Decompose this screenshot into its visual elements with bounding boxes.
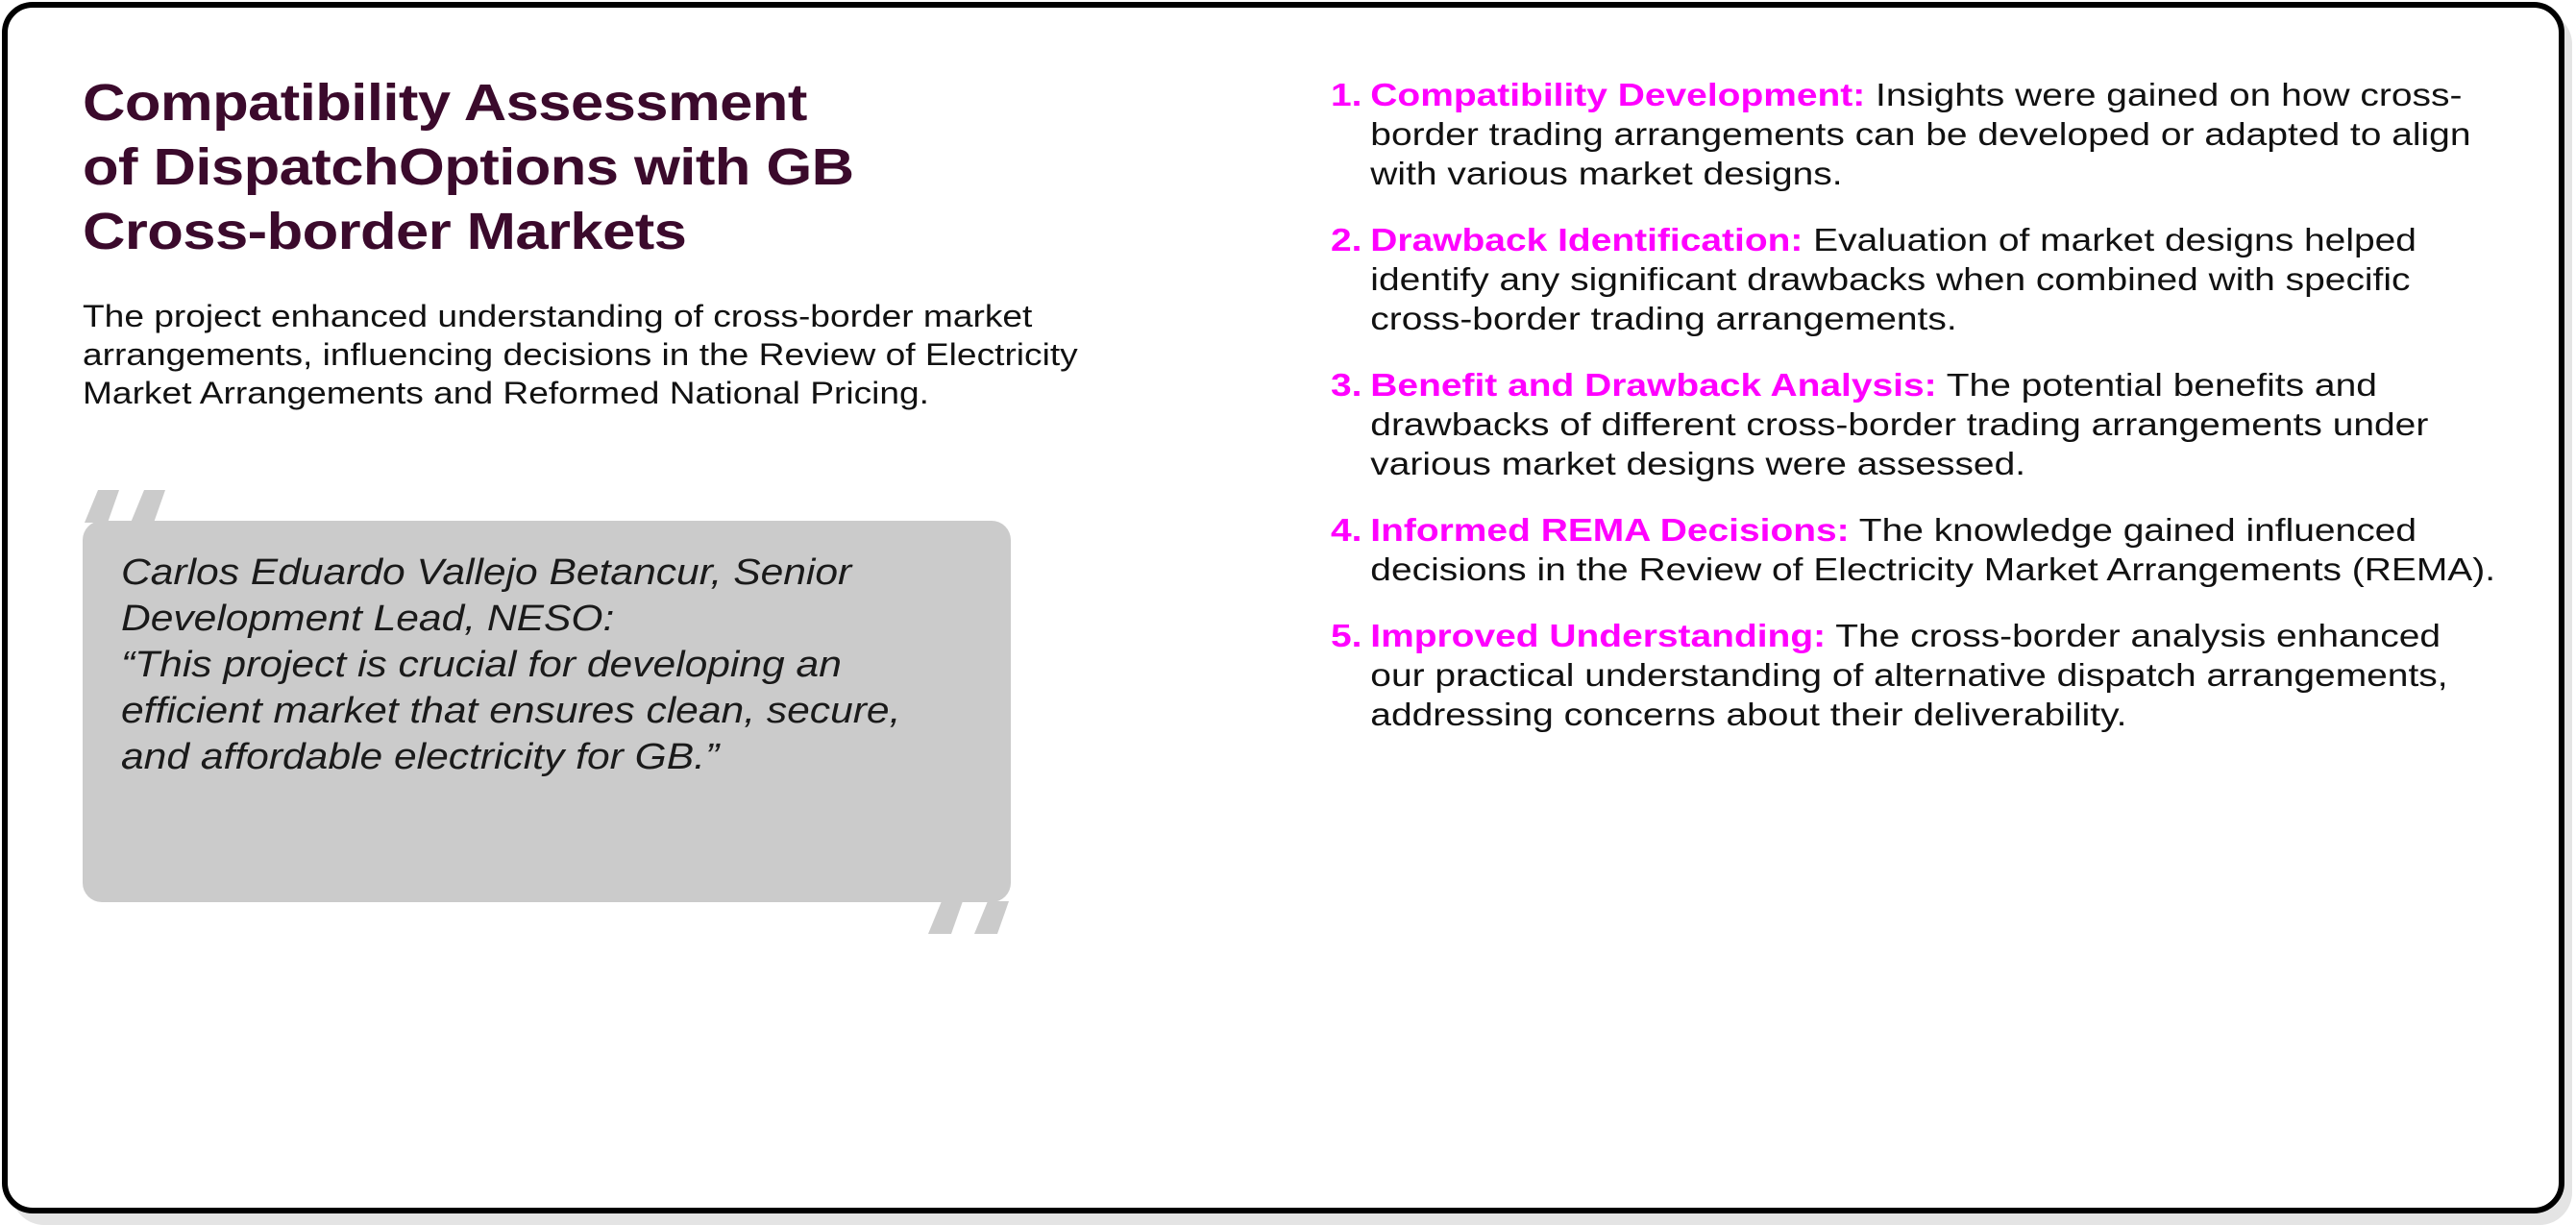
quote text: Carlos Eduardo Vallejo Betancur, Senior: [121, 552, 851, 593]
item 5: addressing concerns about their deliverability.: [1370, 697, 2126, 732]
numbered list of outcomes: [1331, 77, 2495, 732]
item 1: [1331, 77, 2471, 191]
quote text: Development Lead, NESO:: [121, 599, 614, 639]
intro text: The project enhanced understanding of cross-border market: [83, 299, 1032, 333]
intro text: Market Arrangements and Reformed National Pricing.: [83, 376, 929, 410]
item 3: various market designs were assessed.: [1370, 446, 2025, 481]
item 2: [1331, 222, 2417, 336]
quote text: efficient market that ensures clean, secure,: [121, 691, 900, 731]
item 2: Drawback Identification: Evaluation of market designs helped: [1370, 222, 2417, 257]
item 2: cross-border trading arrangements.: [1370, 301, 1957, 336]
icon: closing quote mark: [928, 901, 1009, 934]
item 1: Compatibility Development: Insights were gained on how cross-: [1370, 77, 2462, 112]
item 3: Benefit and Drawback Analysis: The potential benefits and: [1370, 367, 2377, 403]
icon: opening quote mark: [85, 490, 165, 523]
item 4: [1331, 512, 2495, 587]
item 5: [1331, 618, 2448, 732]
item 1: with various market designs.: [1370, 156, 1843, 191]
item 3: drawbacks of different cross-border trading arrangements under: [1370, 406, 2428, 442]
item 5: Improved Understanding: The cross-border analysis enhanced: [1370, 618, 2441, 653]
item 3: 3.: [1331, 367, 1362, 403]
item 5: 5.: [1331, 618, 1362, 653]
quote text: and affordable electricity for GB.”: [121, 737, 719, 777]
intro text: arrangements, influencing decisions in the Review of Electricity: [83, 337, 1078, 372]
quote text: [121, 552, 900, 777]
item 1: border trading arrangements can be developed or adapted to align: [1370, 116, 2471, 152]
quote box: [83, 521, 1011, 902]
quote text: “This project is crucial for developing an: [121, 645, 842, 685]
item 1: 1.: [1331, 77, 1362, 112]
title: Compatibility Assessment: [83, 74, 807, 132]
intro text: [83, 299, 1078, 410]
item 3: [1331, 367, 2428, 481]
item 4: Informed REMA Decisions: The knowledge gained influenced: [1370, 512, 2417, 548]
item 4: 4.: [1331, 512, 1362, 548]
item 4: decisions in the Review of Electricity Market Arrangements (REMA).: [1370, 551, 2495, 587]
item 5: our practical understanding of alternative dispatch arrangements,: [1370, 657, 2448, 693]
title: Cross-border Markets: [83, 203, 686, 260]
title: [83, 74, 854, 260]
item 2: 2.: [1331, 222, 1362, 257]
item 2: identify any significant drawbacks when combined with specific: [1370, 261, 2411, 297]
title: of DispatchOptions with GB: [83, 138, 854, 196]
